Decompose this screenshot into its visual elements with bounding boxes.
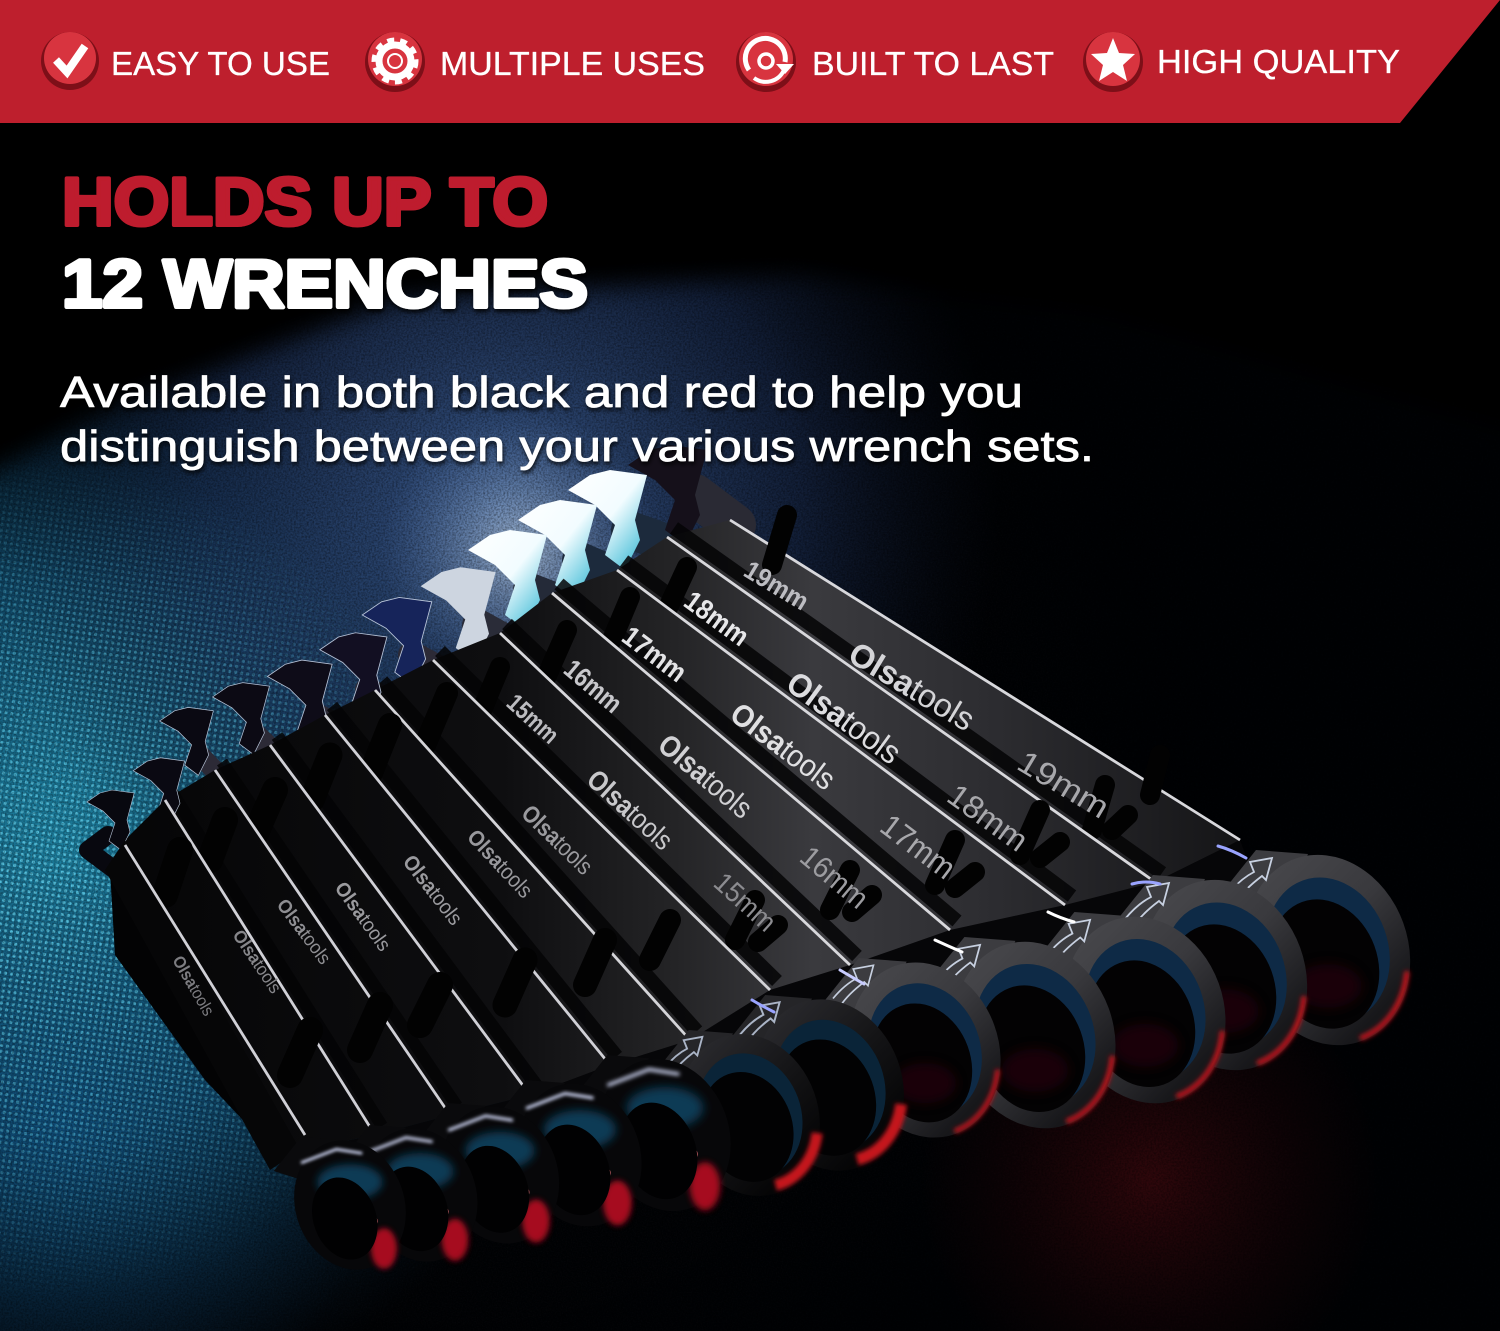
wrench 18mm	[568, 470, 1333, 1094]
feature: built to last	[736, 32, 1054, 92]
wrench 17mm	[518, 500, 1251, 1126]
heading line: holds up to: HOLDS UP TO	[62, 164, 548, 240]
photo: dark area behind the ring necks	[300, 840, 1300, 1250]
background: dark fabric with blue light	[0, 269, 1325, 1331]
feature: high quality	[1083, 32, 1400, 92]
wrench 16mm: 16mm	[794, 840, 874, 915]
wrench 10mm: Olsatools	[272, 895, 335, 969]
wrench 15mm: 15mm	[708, 866, 782, 938]
description text	[60, 368, 1094, 471]
wrench 18mm: 18mm	[678, 585, 755, 652]
wrench 16mm: 16mm	[558, 654, 628, 719]
photo: set of 12 ratcheting wrenches	[87, 445, 1436, 1286]
heading line: 12 wrenches: 12 WRENCHES	[62, 246, 588, 322]
wrench 15mm	[421, 567, 1025, 1159]
wrench 15mm: Olsatools	[581, 763, 679, 856]
wrench 11mm: Olsatools	[330, 878, 395, 956]
wrench 18mm: Olsatools	[780, 664, 908, 771]
wrench 19mm: Olsatools	[842, 634, 981, 738]
wrench 16mm	[468, 530, 1141, 1151]
wrench 16mm: Olsatools	[652, 728, 759, 825]
wrench 19mm	[628, 445, 1436, 1069]
heading	[62, 164, 588, 322]
label: multiple uses: MULTIPLE USES	[440, 45, 705, 82]
feature: easy to use	[41, 32, 330, 90]
photo: wrench rack holder	[110, 840, 330, 1175]
wrench 14mm	[362, 597, 928, 1192]
wrench 14mm: Olsatools	[516, 800, 598, 880]
wrench 10mm	[160, 707, 578, 1260]
wrench 17mm: 17mm	[874, 807, 963, 886]
icon: gear badge	[365, 32, 425, 92]
wrench 12mm: Olsatools	[398, 851, 467, 930]
photo: bright highlights on wrench shoulders	[752, 846, 1246, 1012]
wrench 8mm	[87, 790, 424, 1286]
wrench 9mm: Olsatools	[229, 926, 286, 997]
description text: Available in both black and red to help you	[60, 368, 1023, 417]
icon: star badge	[1083, 32, 1143, 92]
wrench 11mm	[213, 683, 661, 1244]
wrench 17mm: Olsatools	[724, 696, 842, 797]
icon: check mark badge	[41, 32, 99, 90]
wrench 12mm	[267, 660, 752, 1230]
wrench 19mm: 19mm	[739, 554, 814, 616]
wrench 17mm: 17mm	[616, 620, 693, 688]
wrench 13mm	[320, 633, 842, 1216]
wrench 13mm: Olsatools	[462, 824, 538, 903]
label: easy to use: EASY TO USE	[111, 45, 330, 82]
wrench 8mm: Olsatools	[169, 952, 218, 1019]
feature: multiple uses	[365, 32, 705, 92]
label: built to last: BUILT TO LAST	[812, 45, 1054, 82]
wrench 19mm: 19mm	[1011, 743, 1116, 826]
wrench 15mm: 15mm	[501, 689, 564, 750]
wrench 9mm	[125, 758, 496, 1278]
top banner	[0, 0, 1500, 123]
wrench 18mm: 18mm	[941, 777, 1035, 859]
label: high quality: HIGH QUALITY	[1157, 43, 1400, 80]
photo: wrench necks between jaws and shafts	[88, 495, 735, 868]
description text: distinguish between your various wrench sets.	[60, 422, 1094, 471]
icon: circular arrow badge	[736, 32, 796, 92]
